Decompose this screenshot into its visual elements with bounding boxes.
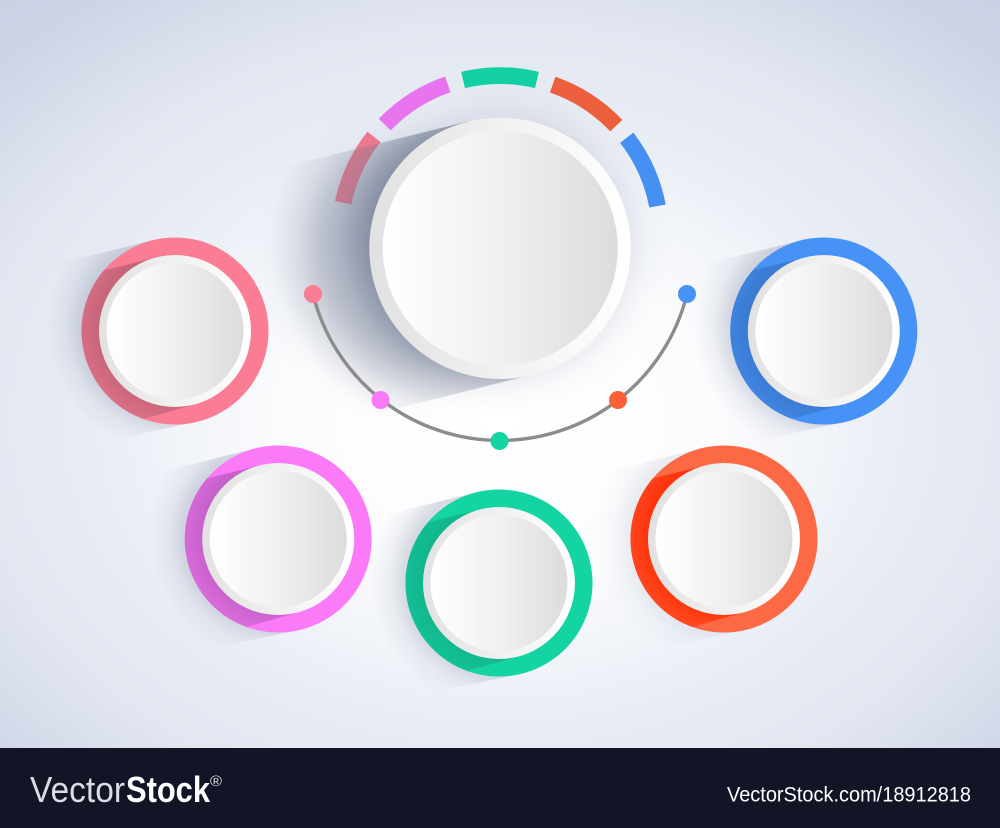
arc segment: magenta bbox=[385, 84, 448, 125]
main circle rim bbox=[369, 118, 631, 379]
soft grey haze left of main circle bbox=[298, 150, 522, 374]
main circle bbox=[158, 114, 631, 452]
footer bar bbox=[0, 748, 1000, 828]
main circle long shadow bbox=[158, 121, 531, 452]
dot: orange bbox=[609, 391, 627, 409]
arc segment: pink bbox=[343, 137, 374, 203]
arc segment: orange bbox=[553, 85, 616, 126]
arc segments above main circle bbox=[343, 76, 658, 206]
main circle face bbox=[383, 131, 618, 366]
dot: pink bbox=[304, 285, 322, 303]
circle: orange bbox=[616, 446, 818, 638]
dot: magenta bbox=[372, 391, 390, 409]
connector arc with dots bbox=[304, 285, 696, 450]
logo: Vector: Vector bbox=[30, 769, 125, 810]
circle: blue bbox=[707, 238, 918, 434]
circle: teal bbox=[382, 490, 592, 686]
main circle soft glow bbox=[367, 114, 631, 378]
dot: teal bbox=[490, 432, 508, 450]
logo: registered mark: ® bbox=[210, 773, 222, 790]
connector arc bbox=[313, 294, 687, 440]
dot: blue bbox=[678, 285, 696, 303]
circle: magenta bbox=[163, 446, 372, 642]
circle: pink bbox=[61, 238, 268, 434]
image id: VectorStock.com/18912818 bbox=[727, 784, 971, 806]
logo: Stock: Stock bbox=[126, 769, 211, 810]
arc segment: blue bbox=[627, 138, 658, 206]
arc segment: teal bbox=[463, 76, 537, 80]
